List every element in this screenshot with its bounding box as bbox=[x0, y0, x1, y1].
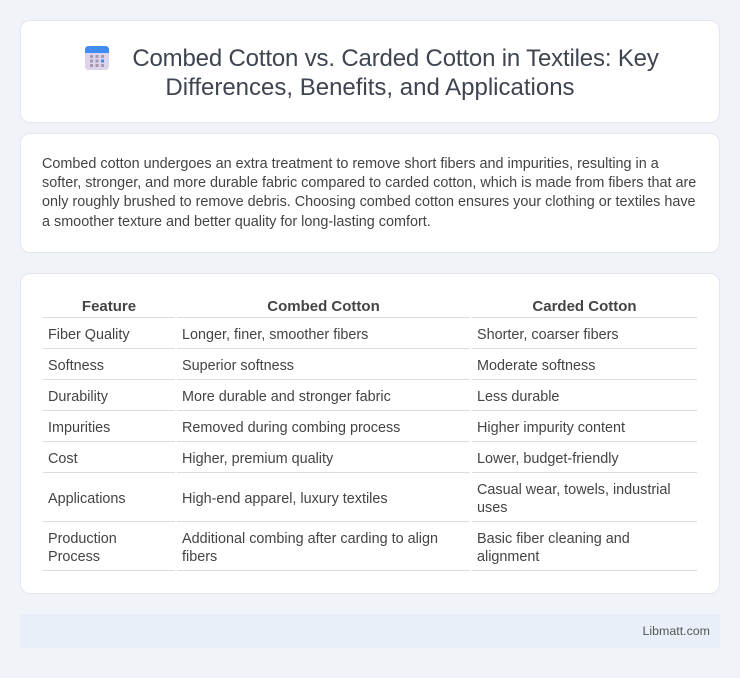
title bbox=[132, 45, 659, 101]
table: feature comparison bbox=[43, 298, 697, 571]
footer bbox=[20, 614, 720, 648]
table: feature comparison: alignment bbox=[477, 548, 539, 564]
table: feature comparison: Shorter, coarser fibers bbox=[477, 326, 619, 342]
table: feature comparison: More durable and stronger fabric bbox=[182, 388, 391, 404]
table: feature comparison: Higher, premium quality bbox=[182, 450, 333, 466]
table: feature comparison: Carded Cotton bbox=[532, 298, 637, 315]
table: feature comparison: Longer, finer, smoother fibers bbox=[182, 326, 368, 342]
table: feature comparison: High-end apparel, luxury textiles bbox=[182, 490, 388, 506]
table: feature comparison: Impurities bbox=[48, 420, 110, 436]
table: feature comparison: Fiber Quality bbox=[48, 326, 130, 342]
table: feature comparison: Higher impurity content bbox=[477, 420, 625, 436]
table: feature comparison: Casual wear, towels, industrial bbox=[477, 482, 671, 498]
title: Differences, Benefits, and Applications bbox=[165, 74, 575, 101]
table: feature comparison: Process bbox=[48, 548, 100, 564]
table: feature comparison: Lower, budget-friendly bbox=[477, 450, 619, 466]
table: feature comparison: Combed Cotton bbox=[267, 298, 380, 315]
table: feature comparison: Additional combing after carding to align bbox=[182, 530, 438, 546]
table: feature comparison: uses bbox=[477, 500, 507, 516]
text block: introduction bbox=[42, 156, 696, 230]
table: feature comparison: Feature bbox=[82, 298, 136, 315]
text block: introduction: Combed cotton undergoes an extra treatment to remove short fibers and impurities, resulting in a bbox=[42, 156, 659, 172]
table: feature comparison: Cost bbox=[48, 450, 78, 466]
table: feature comparison: Basic fiber cleaning and bbox=[477, 530, 630, 546]
text block: introduction: a smoother texture and better quality for long-lasting comfort. bbox=[42, 214, 431, 230]
table: feature comparison: Less durable bbox=[477, 388, 559, 404]
panel: comparison table bbox=[20, 273, 720, 594]
panel: title card bbox=[20, 20, 720, 123]
footer: Libmatt.com bbox=[643, 624, 710, 638]
table: feature comparison: Softness bbox=[48, 358, 104, 374]
table: feature comparison: Production bbox=[48, 530, 117, 546]
table: feature comparison: Removed during combing process bbox=[182, 420, 400, 436]
text block: introduction: only roughly brushed to remove debris. Choosing combed cotton ensures your clothing or textiles have bbox=[42, 194, 696, 210]
table: feature comparison: Applications bbox=[48, 490, 126, 506]
icon: calendar bbox=[85, 46, 109, 70]
panel: introduction bbox=[20, 133, 720, 253]
table: feature comparison: Durability bbox=[48, 388, 108, 404]
table: feature comparison: fibers bbox=[182, 548, 217, 564]
table: feature comparison: Moderate softness bbox=[477, 358, 595, 374]
title: Combed Cotton vs. Carded Cotton in Textiles: Key bbox=[132, 45, 659, 72]
table: feature comparison: Superior softness bbox=[182, 358, 294, 374]
text block: introduction: softer, stronger, and more durable fabric compared to carded cotton, which is made from fibers that are bbox=[42, 175, 696, 191]
